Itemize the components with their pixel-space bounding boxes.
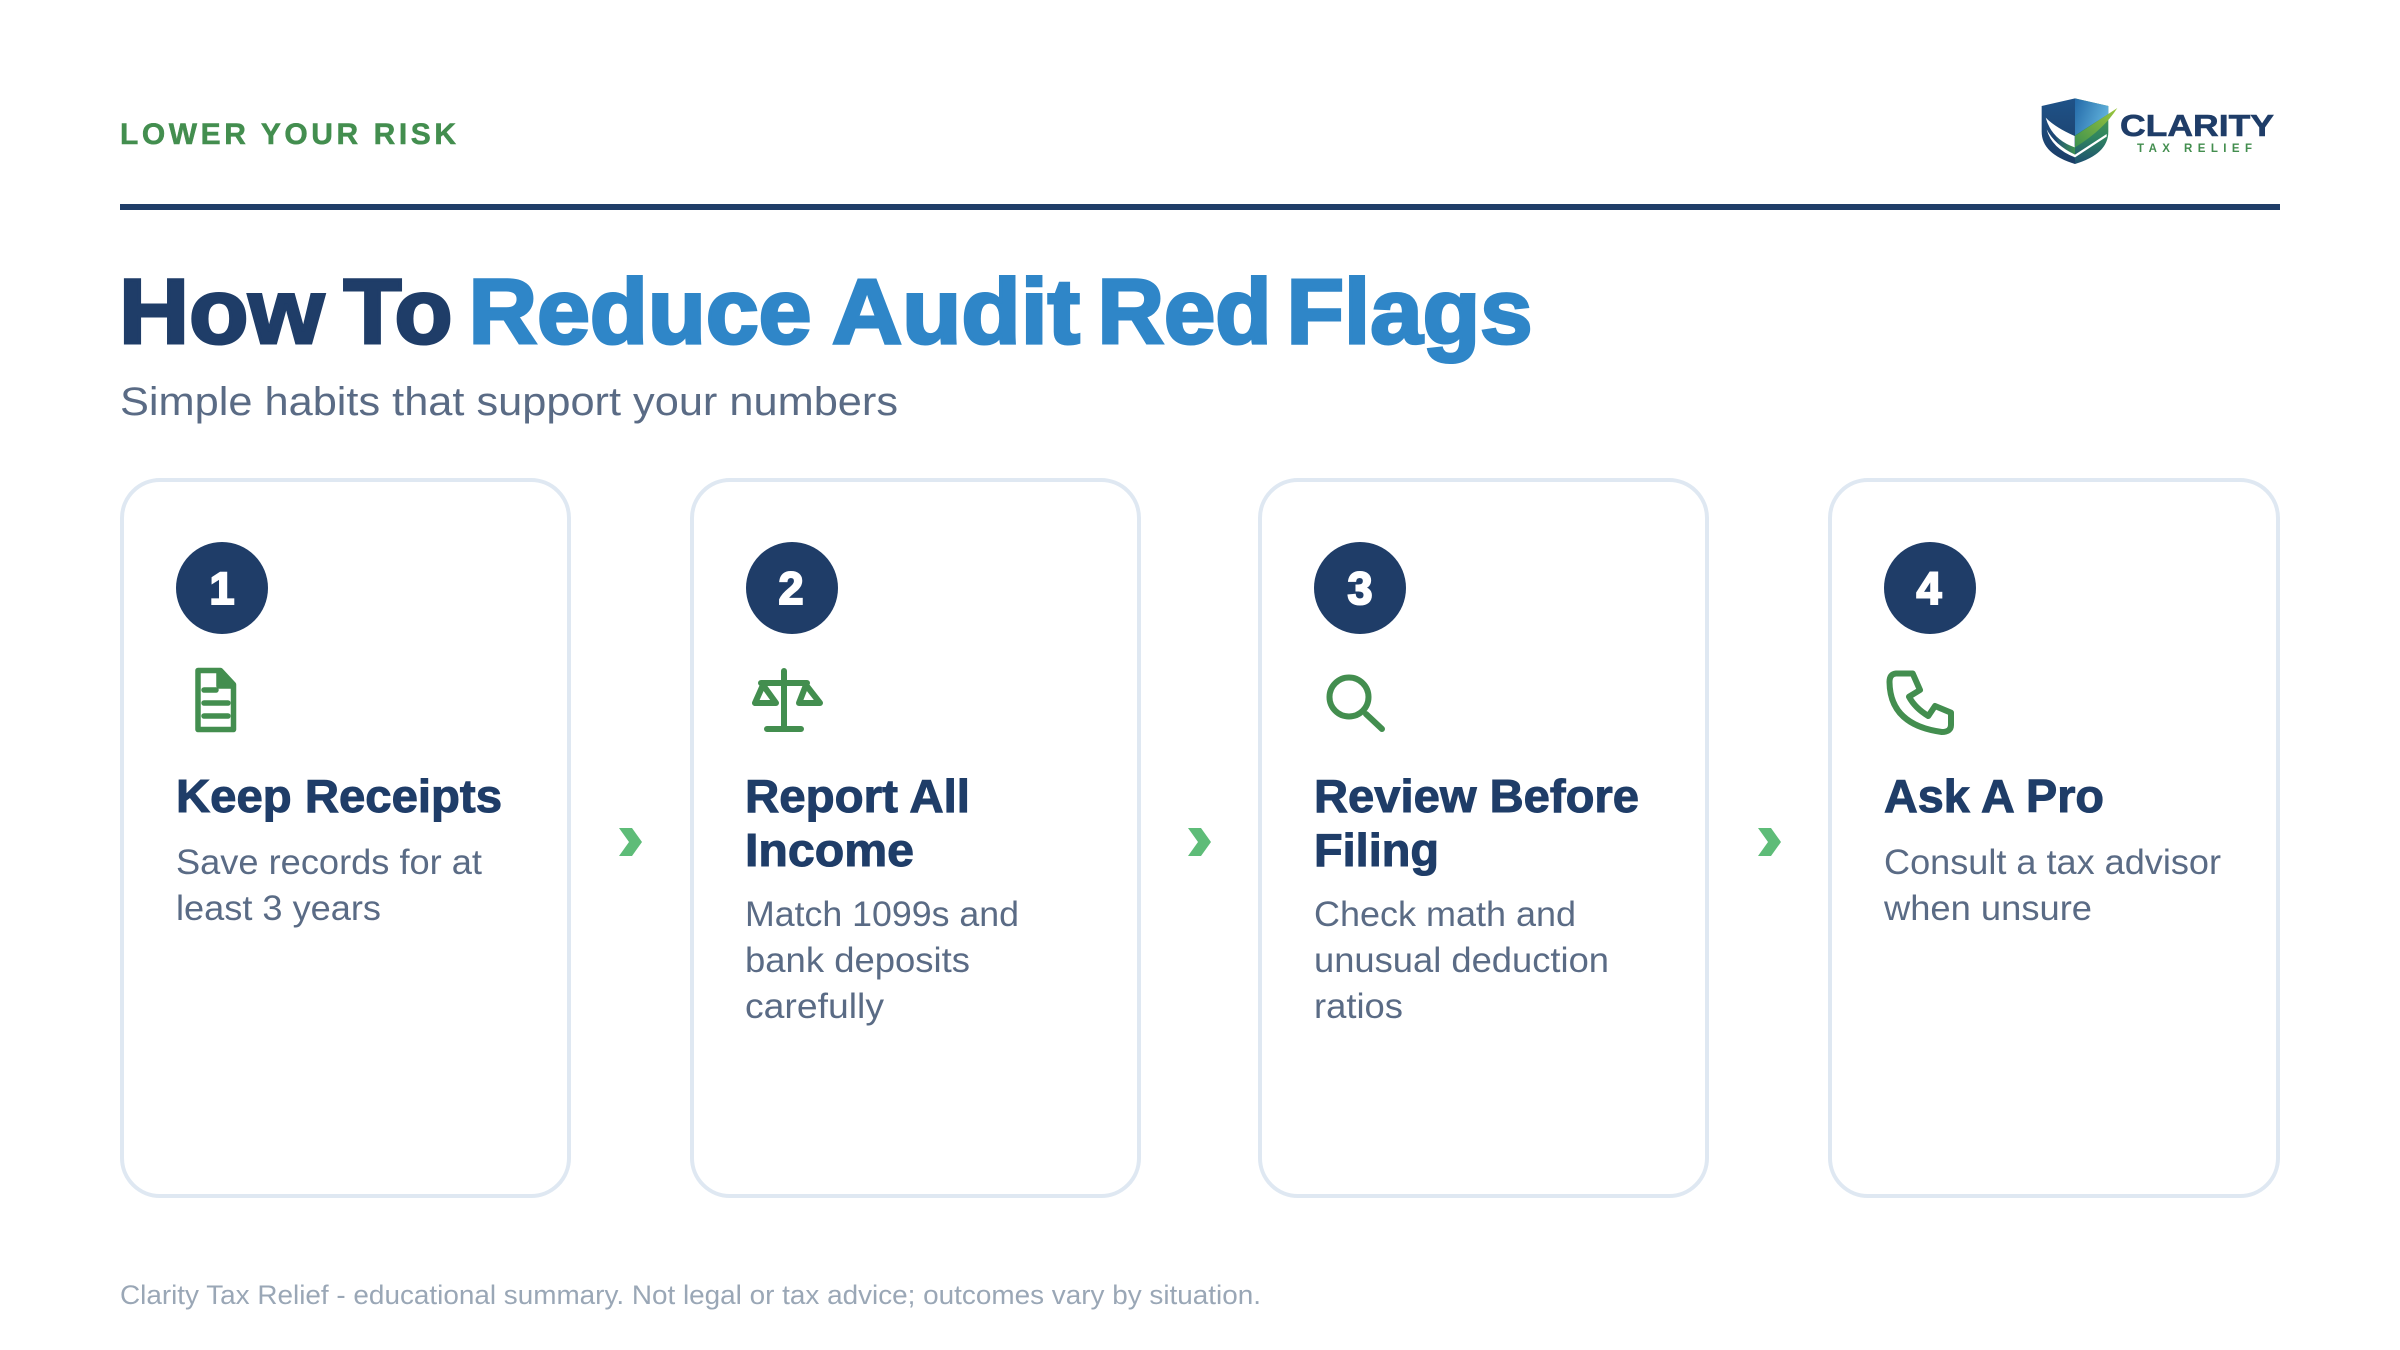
description: bank deposits bbox=[745, 941, 970, 980]
description: ratios bbox=[1314, 987, 1403, 1026]
title: Reduce bbox=[468, 261, 812, 363]
heading: Ask A Pro bbox=[1884, 770, 2104, 822]
heading: Filing bbox=[1314, 824, 1439, 876]
description bbox=[176, 843, 482, 928]
number badge 2: 2 bbox=[778, 563, 804, 614]
description: Save records for at bbox=[176, 843, 482, 882]
title: How bbox=[119, 261, 324, 363]
heading: Income bbox=[745, 824, 914, 876]
description: carefully bbox=[745, 987, 885, 1026]
description: Consult a tax advisor bbox=[1884, 843, 2221, 882]
description bbox=[1314, 895, 1609, 1026]
icon: document bbox=[198, 670, 234, 730]
header rule bbox=[120, 204, 2280, 210]
number badge 1: 1 bbox=[209, 563, 235, 614]
panel: step 2 Report All Income bbox=[692, 480, 1139, 1196]
icon: phone bbox=[1890, 674, 1951, 732]
number badge 3 bbox=[1314, 542, 1406, 634]
panel: step 3 Review Before Filing bbox=[1260, 480, 1707, 1196]
title: Red bbox=[1098, 261, 1272, 363]
arrow 2 bbox=[1188, 828, 1211, 856]
title: Audit bbox=[832, 261, 1080, 363]
heading bbox=[745, 770, 970, 876]
title: To bbox=[344, 261, 452, 363]
number badge 2 bbox=[746, 542, 838, 634]
icon: balance scale bbox=[755, 671, 820, 729]
title bbox=[119, 261, 1532, 363]
panel: step 4 Ask A Pro bbox=[1830, 480, 2278, 1196]
description bbox=[1883, 843, 2221, 928]
description: Check math and bbox=[1314, 895, 1576, 934]
description: when unsure bbox=[1883, 889, 2092, 928]
number badge 4: 4 bbox=[1916, 563, 1942, 614]
icon: magnifying glass bbox=[1330, 678, 1382, 729]
panel: step 1 Keep Receipts bbox=[122, 480, 569, 1196]
icon: shield with check bbox=[2042, 98, 2117, 164]
logo tagline: TAX RELIEF bbox=[2137, 143, 2252, 155]
description: Match 1099s and bbox=[745, 895, 1019, 934]
arrow 1 bbox=[619, 828, 642, 856]
eyebrow label: LOWER YOUR RISK bbox=[120, 118, 456, 151]
footer disclaimer: Clarity Tax Relief - educational summary. Not legal or tax advice; outcomes vary by situation. bbox=[120, 1280, 1261, 1310]
arrow 3 bbox=[1758, 828, 1781, 856]
heading: Keep Receipts bbox=[176, 770, 502, 822]
logo: Clarity Tax Relief bbox=[2042, 98, 2274, 164]
description bbox=[745, 895, 1019, 1026]
number badge 4 bbox=[1884, 542, 1976, 634]
subtitle: Simple habits that support your numbers bbox=[120, 380, 898, 424]
number badge 1 bbox=[176, 542, 268, 634]
card frame bbox=[122, 480, 569, 1196]
card frame bbox=[1260, 480, 1707, 1196]
heading bbox=[1314, 770, 1639, 876]
logo wordmark: CLARITY bbox=[2120, 108, 2274, 143]
card frame bbox=[1830, 480, 2278, 1196]
number badge 3: 3 bbox=[1347, 563, 1373, 614]
description: unusual deduction bbox=[1314, 941, 1609, 980]
description: least 3 years bbox=[176, 889, 381, 928]
heading: Report All bbox=[745, 770, 970, 822]
title: Flags bbox=[1286, 261, 1532, 363]
card frame bbox=[692, 480, 1139, 1196]
heading: Review Before bbox=[1314, 770, 1639, 822]
